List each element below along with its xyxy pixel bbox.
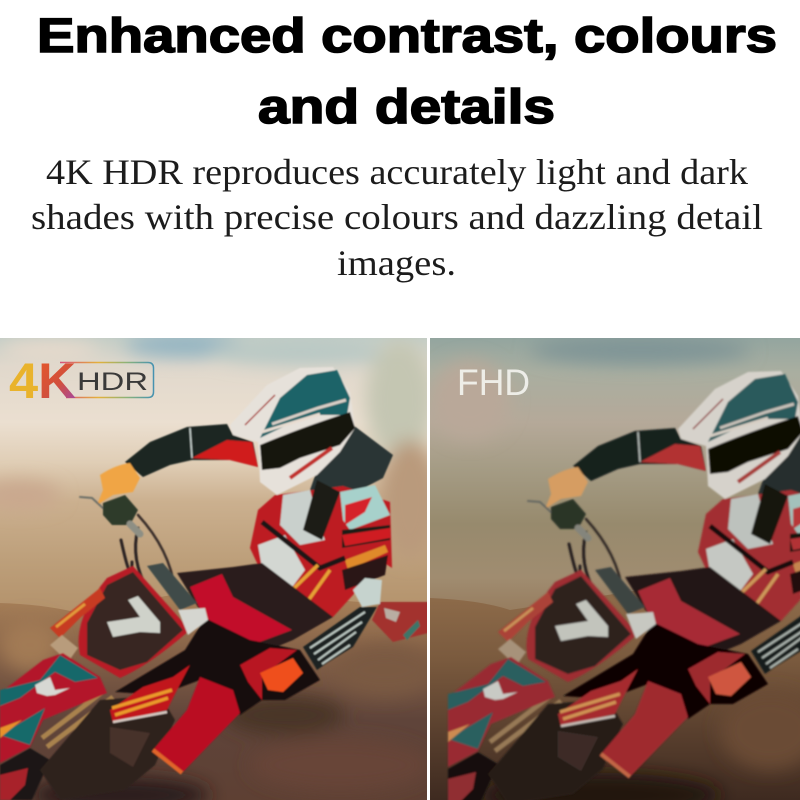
black frame <box>115 618 320 715</box>
front fender <box>50 588 105 662</box>
logo frame <box>60 362 154 398</box>
dark thigh and seat <box>177 563 333 655</box>
lower frame shadow <box>40 695 175 800</box>
striped sleeve <box>303 607 377 670</box>
number plate <box>79 566 190 678</box>
helmet <box>230 367 355 495</box>
knee graphic <box>110 665 190 723</box>
sky background <box>430 338 800 628</box>
red knee panel <box>240 648 297 700</box>
backpack <box>310 425 393 498</box>
dust cloud <box>483 711 800 800</box>
fork tubes <box>42 690 113 747</box>
clouds <box>0 338 427 546</box>
dirt ground <box>0 590 427 800</box>
instrument pod <box>147 563 197 610</box>
logo HDR: HDR <box>77 368 148 396</box>
panel: 4K HDR photo <box>0 333 440 800</box>
dirt ground <box>430 590 800 800</box>
logo 4K: 4K <box>9 353 76 409</box>
orange boot trim <box>153 750 182 773</box>
lower leg, red <box>153 677 240 773</box>
title: Enhanced contrast, colours <box>37 10 777 63</box>
logo: 4K HDR <box>9 353 154 409</box>
red tank and thigh <box>190 574 292 643</box>
dust cloud <box>0 619 435 800</box>
jersey <box>250 480 392 617</box>
front wheel <box>0 748 50 800</box>
plate decal <box>107 596 160 637</box>
description text: shades with precise colours and dazzling detail <box>31 197 763 237</box>
title <box>37 10 777 134</box>
title: and details <box>258 81 555 134</box>
description text: images. <box>337 243 456 283</box>
round jersey patch <box>353 578 382 607</box>
description text: 4K HDR reproduces accurately light and dark <box>46 152 748 192</box>
red and teal bike graphic <box>0 653 107 763</box>
description text <box>31 152 763 283</box>
orange glove, upper hand <box>97 463 140 505</box>
boot <box>110 727 150 767</box>
arm sleeve <box>125 424 258 477</box>
bright fork bracket <box>178 608 208 635</box>
label: FHD: FHD <box>457 362 530 403</box>
sky background <box>0 338 427 628</box>
clouds <box>436 338 746 406</box>
photo: rider on motorbike, 4K HDR <box>0 367 440 800</box>
orange glove, lower hand <box>260 658 303 692</box>
panel: FHD photo background <box>430 336 800 800</box>
front wheel decal <box>0 768 28 800</box>
handlebar and cables <box>80 495 175 590</box>
photo: rider on motorbike, FHD <box>448 371 800 800</box>
rear bike bodywork <box>371 601 427 642</box>
